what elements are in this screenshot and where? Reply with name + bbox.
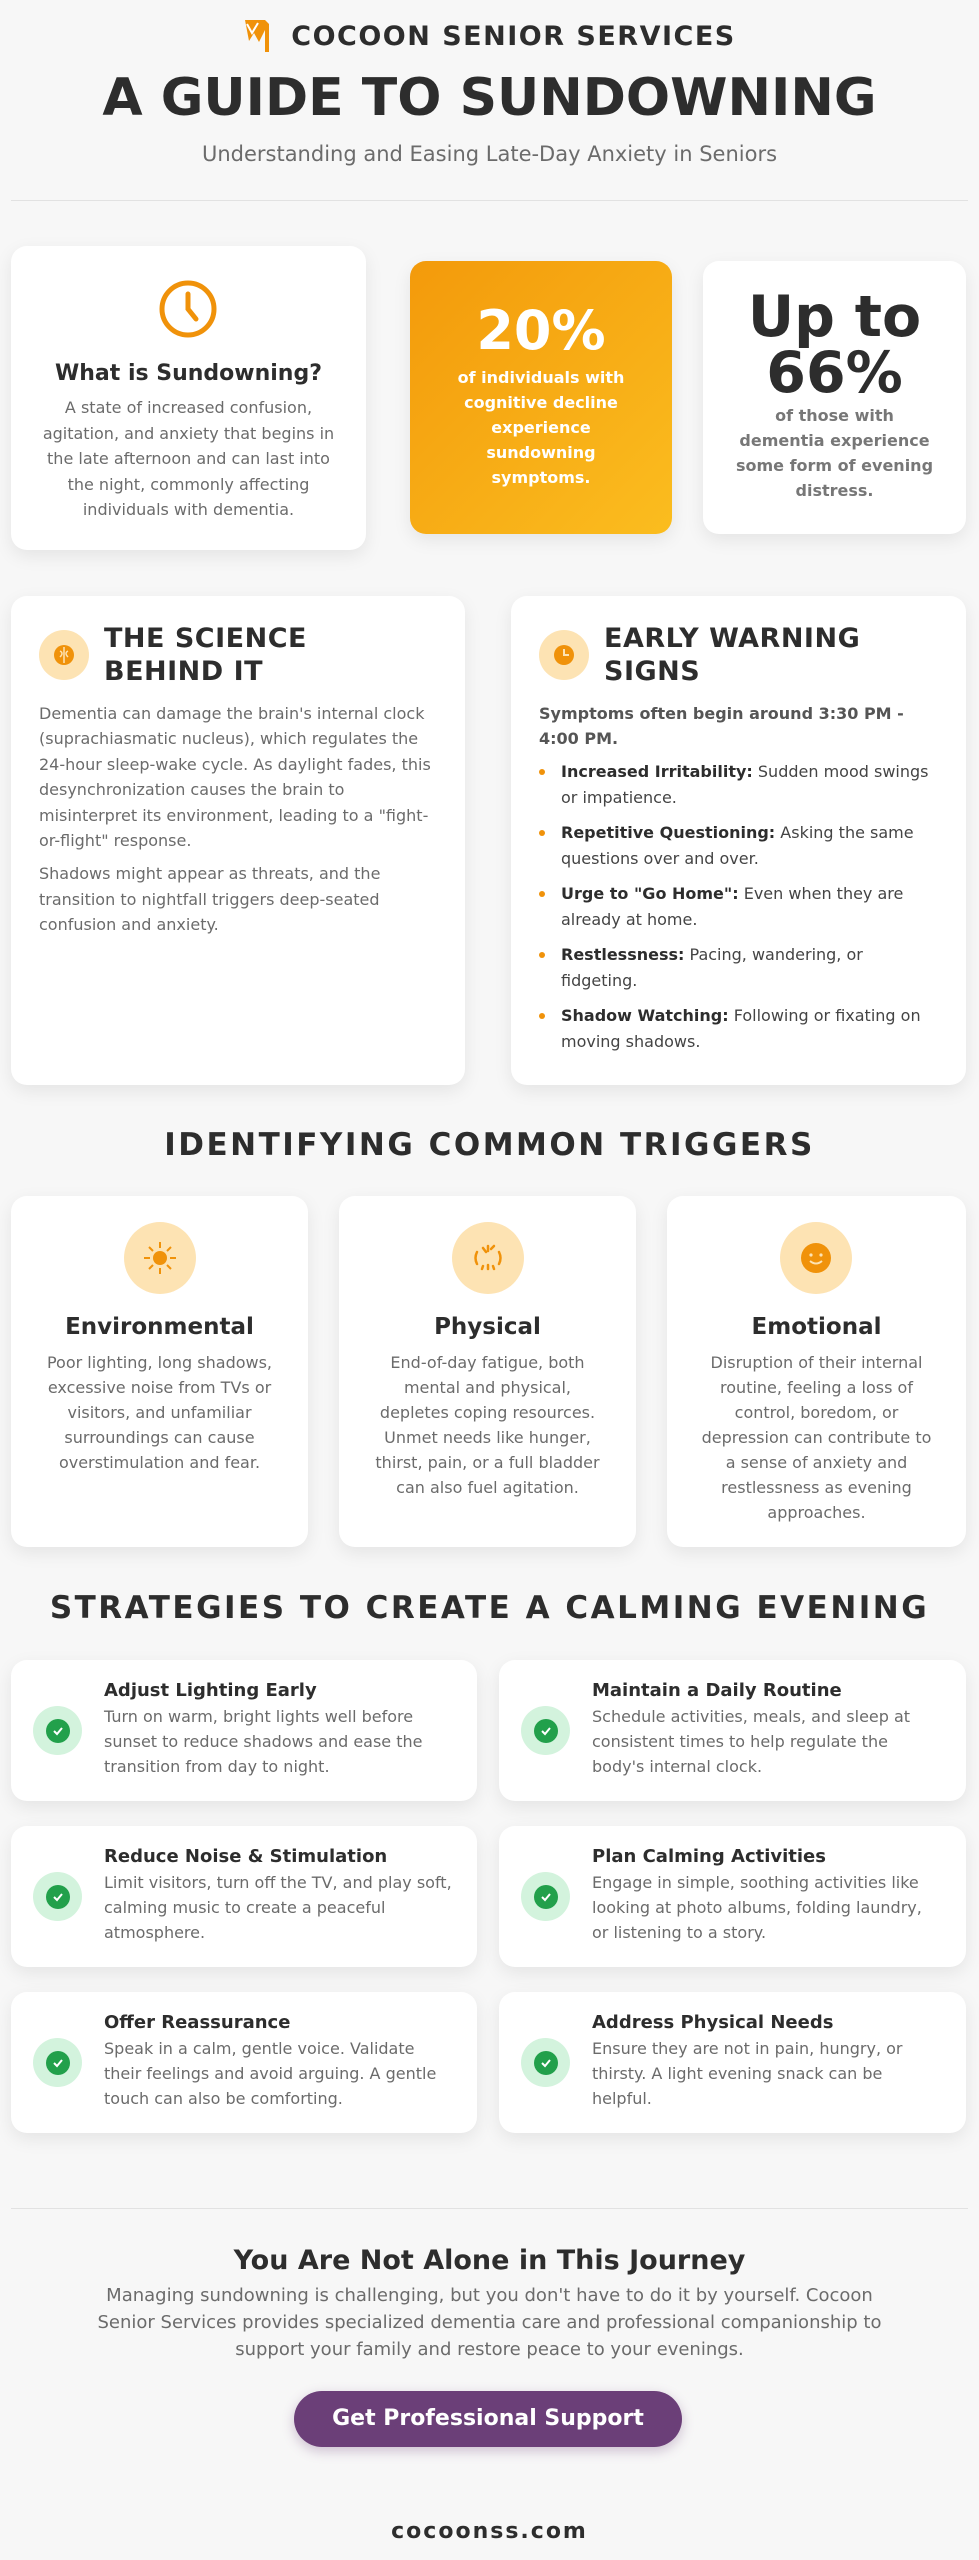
- stat: 66%: Up to: [748, 284, 921, 350]
- card: what is sundowning: [11, 246, 366, 550]
- list: [539, 762, 928, 1050]
- strategy: noise: Limit visitors, turn off the TV, and play soft, calming music to create a peaceful atmosphere.: [104, 1873, 452, 1942]
- card: physical: Physical: [434, 1314, 541, 1340]
- stat: 66%: [703, 261, 966, 534]
- stat: 66%: 66%: [766, 340, 903, 406]
- heading: What is Sundowning?: [55, 361, 322, 386]
- strategy: noise: [11, 1826, 477, 1967]
- strategy: physical needs: Ensure they are not in pain, hungry, or thirsty. A light evening snack can be helpful.: [592, 2039, 902, 2108]
- icon: smile: [780, 1222, 852, 1294]
- card: physical: [339, 1196, 636, 1547]
- heading: [604, 623, 860, 687]
- brand name: COCOON SENIOR SERVICES: [291, 20, 736, 52]
- card: emotional: Emotional: [752, 1314, 881, 1340]
- icon: logo: [245, 20, 269, 52]
- heading: [104, 623, 307, 687]
- text: [39, 704, 431, 934]
- icon: clock: [160, 280, 216, 338]
- icon: sun: [124, 1222, 196, 1294]
- title: A GUIDE TO SUNDOWNING: [102, 68, 877, 128]
- heading: triggers: IDENTIFYING COMMON TRIGGERS: [164, 1127, 815, 1163]
- list: Repetitive Questioning: Asking the same questions over and over.: [561, 823, 914, 868]
- button: Get Professional Support: [332, 2406, 644, 2431]
- heading: EARLY WARNING: [604, 623, 860, 654]
- strategy: lighting: Adjust Lighting Early: [104, 1680, 317, 1701]
- subtitle: Understanding and Easing Late-Day Anxiety in Seniors: [202, 142, 777, 166]
- card: environmental: [11, 1196, 308, 1547]
- list: Urge to "Go Home": Even when they are already at home.: [561, 884, 903, 928]
- strategy: reassurance: Offer Reassurance: [104, 2012, 290, 2033]
- strategy: reassurance: Speak in a calm, gentle voice. Validate their feelings and avoid arguing. A gentle touch can also be comforting.: [104, 2039, 436, 2108]
- stat: 20%: of individuals with cognitive decline experience sundowning symptoms.: [458, 368, 624, 487]
- list: Shadow Watching: Following or fixating on moving shadows.: [561, 1006, 921, 1050]
- list: Restlessness: Pacing, wandering, or fidgeting.: [561, 945, 863, 990]
- icon: brain: [39, 630, 89, 680]
- strategy: activities: Plan Calming Activities: [592, 1846, 826, 1867]
- stat: 20%: 20%: [476, 299, 606, 362]
- heading: SIGNS: [604, 656, 700, 687]
- strategy: activities: Engage in simple, soothing activities like looking at photo albums, folding laundry, or listening to a story.: [592, 1873, 922, 1942]
- strategy: routine: Schedule activities, meals, and sleep at consistent times to help regulate the body's internal clock.: [592, 1707, 910, 1776]
- closing heading: You Are Not Alone in This Journey: [234, 2245, 745, 2276]
- heading: strategies: STRATEGIES TO CREATE A CALMING EVENING: [50, 1590, 929, 1626]
- button: [294, 2391, 682, 2447]
- icon: tired: [452, 1222, 524, 1294]
- strategy: noise: Reduce Noise & Stimulation: [104, 1846, 387, 1867]
- heading: THE SCIENCE: [104, 623, 307, 654]
- stat: 20%: [410, 261, 672, 534]
- text: Shadows might appear as threats, and the transition to nightfall triggers deep-seated confusion and anxiety.: [39, 864, 380, 934]
- card: emotional: Disruption of their internal routine, feeling a loss of control, boredom, or depression can contribute to a sense of anxiety and restlessness as evening approaches.: [702, 1353, 931, 1522]
- icon: clock: [539, 630, 589, 680]
- stat: 66%: of those with dementia experience some form of evening distress.: [736, 406, 933, 500]
- header brand: [245, 20, 736, 52]
- strategy: activities: [499, 1826, 966, 1967]
- strategy: reassurance: [11, 1992, 477, 2133]
- closing text: Managing sundowning is challenging, but you don't have to do it by yourself. Cocoon Senior Services provides specialized dementia care and professional companionship to support your family and restore peace to your evenings.: [97, 2285, 882, 2360]
- card: environmental: Poor lighting, long shadows, excessive noise from TVs or visitors, and unfamiliar surroundings can cause overstimulation and fear.: [47, 1353, 272, 1472]
- card: physical: End-of-day fatigue, both mental and physical, depletes coping resources. Unmet needs like hunger, thirst, pain, or a full bladder can also fuel agitation.: [375, 1353, 600, 1497]
- strategy: physical needs: Address Physical Needs: [592, 2012, 833, 2033]
- text: A state of increased confusion, agitation, and anxiety that begins in the late afternoon and can last into the night, commonly affecting individuals with dementia.: [43, 398, 334, 519]
- panel: science: [11, 596, 465, 1085]
- strategy: routine: Maintain a Daily Routine: [592, 1680, 842, 1701]
- strategy: physical needs: [499, 1992, 966, 2133]
- footer: cocoonss.com: [391, 2519, 588, 2544]
- text: Dementia can damage the brain's internal clock (suprachiasmatic nucleus), which regulates the 24-hour sleep-wake cycle. As daylight fades, this desynchronization causes the brain to misinterpret its environment, leading to a "fight-or-flight" response.: [39, 704, 431, 850]
- strategy: routine: [499, 1660, 966, 1801]
- card: emotional: [667, 1196, 966, 1547]
- strategy: lighting: [11, 1660, 477, 1801]
- panel: warning signs: [511, 596, 966, 1085]
- strategy: lighting: Turn on warm, bright lights well before sunset to reduce shadows and ease the transition from day to night.: [104, 1707, 422, 1776]
- card: environmental: Environmental: [65, 1314, 254, 1340]
- heading: BEHIND IT: [104, 656, 263, 687]
- intro: Symptoms often begin around 3:30 PM - 4:00 PM.: [539, 704, 904, 748]
- list: Increased Irritability: Sudden mood swings or impatience.: [561, 762, 928, 806]
